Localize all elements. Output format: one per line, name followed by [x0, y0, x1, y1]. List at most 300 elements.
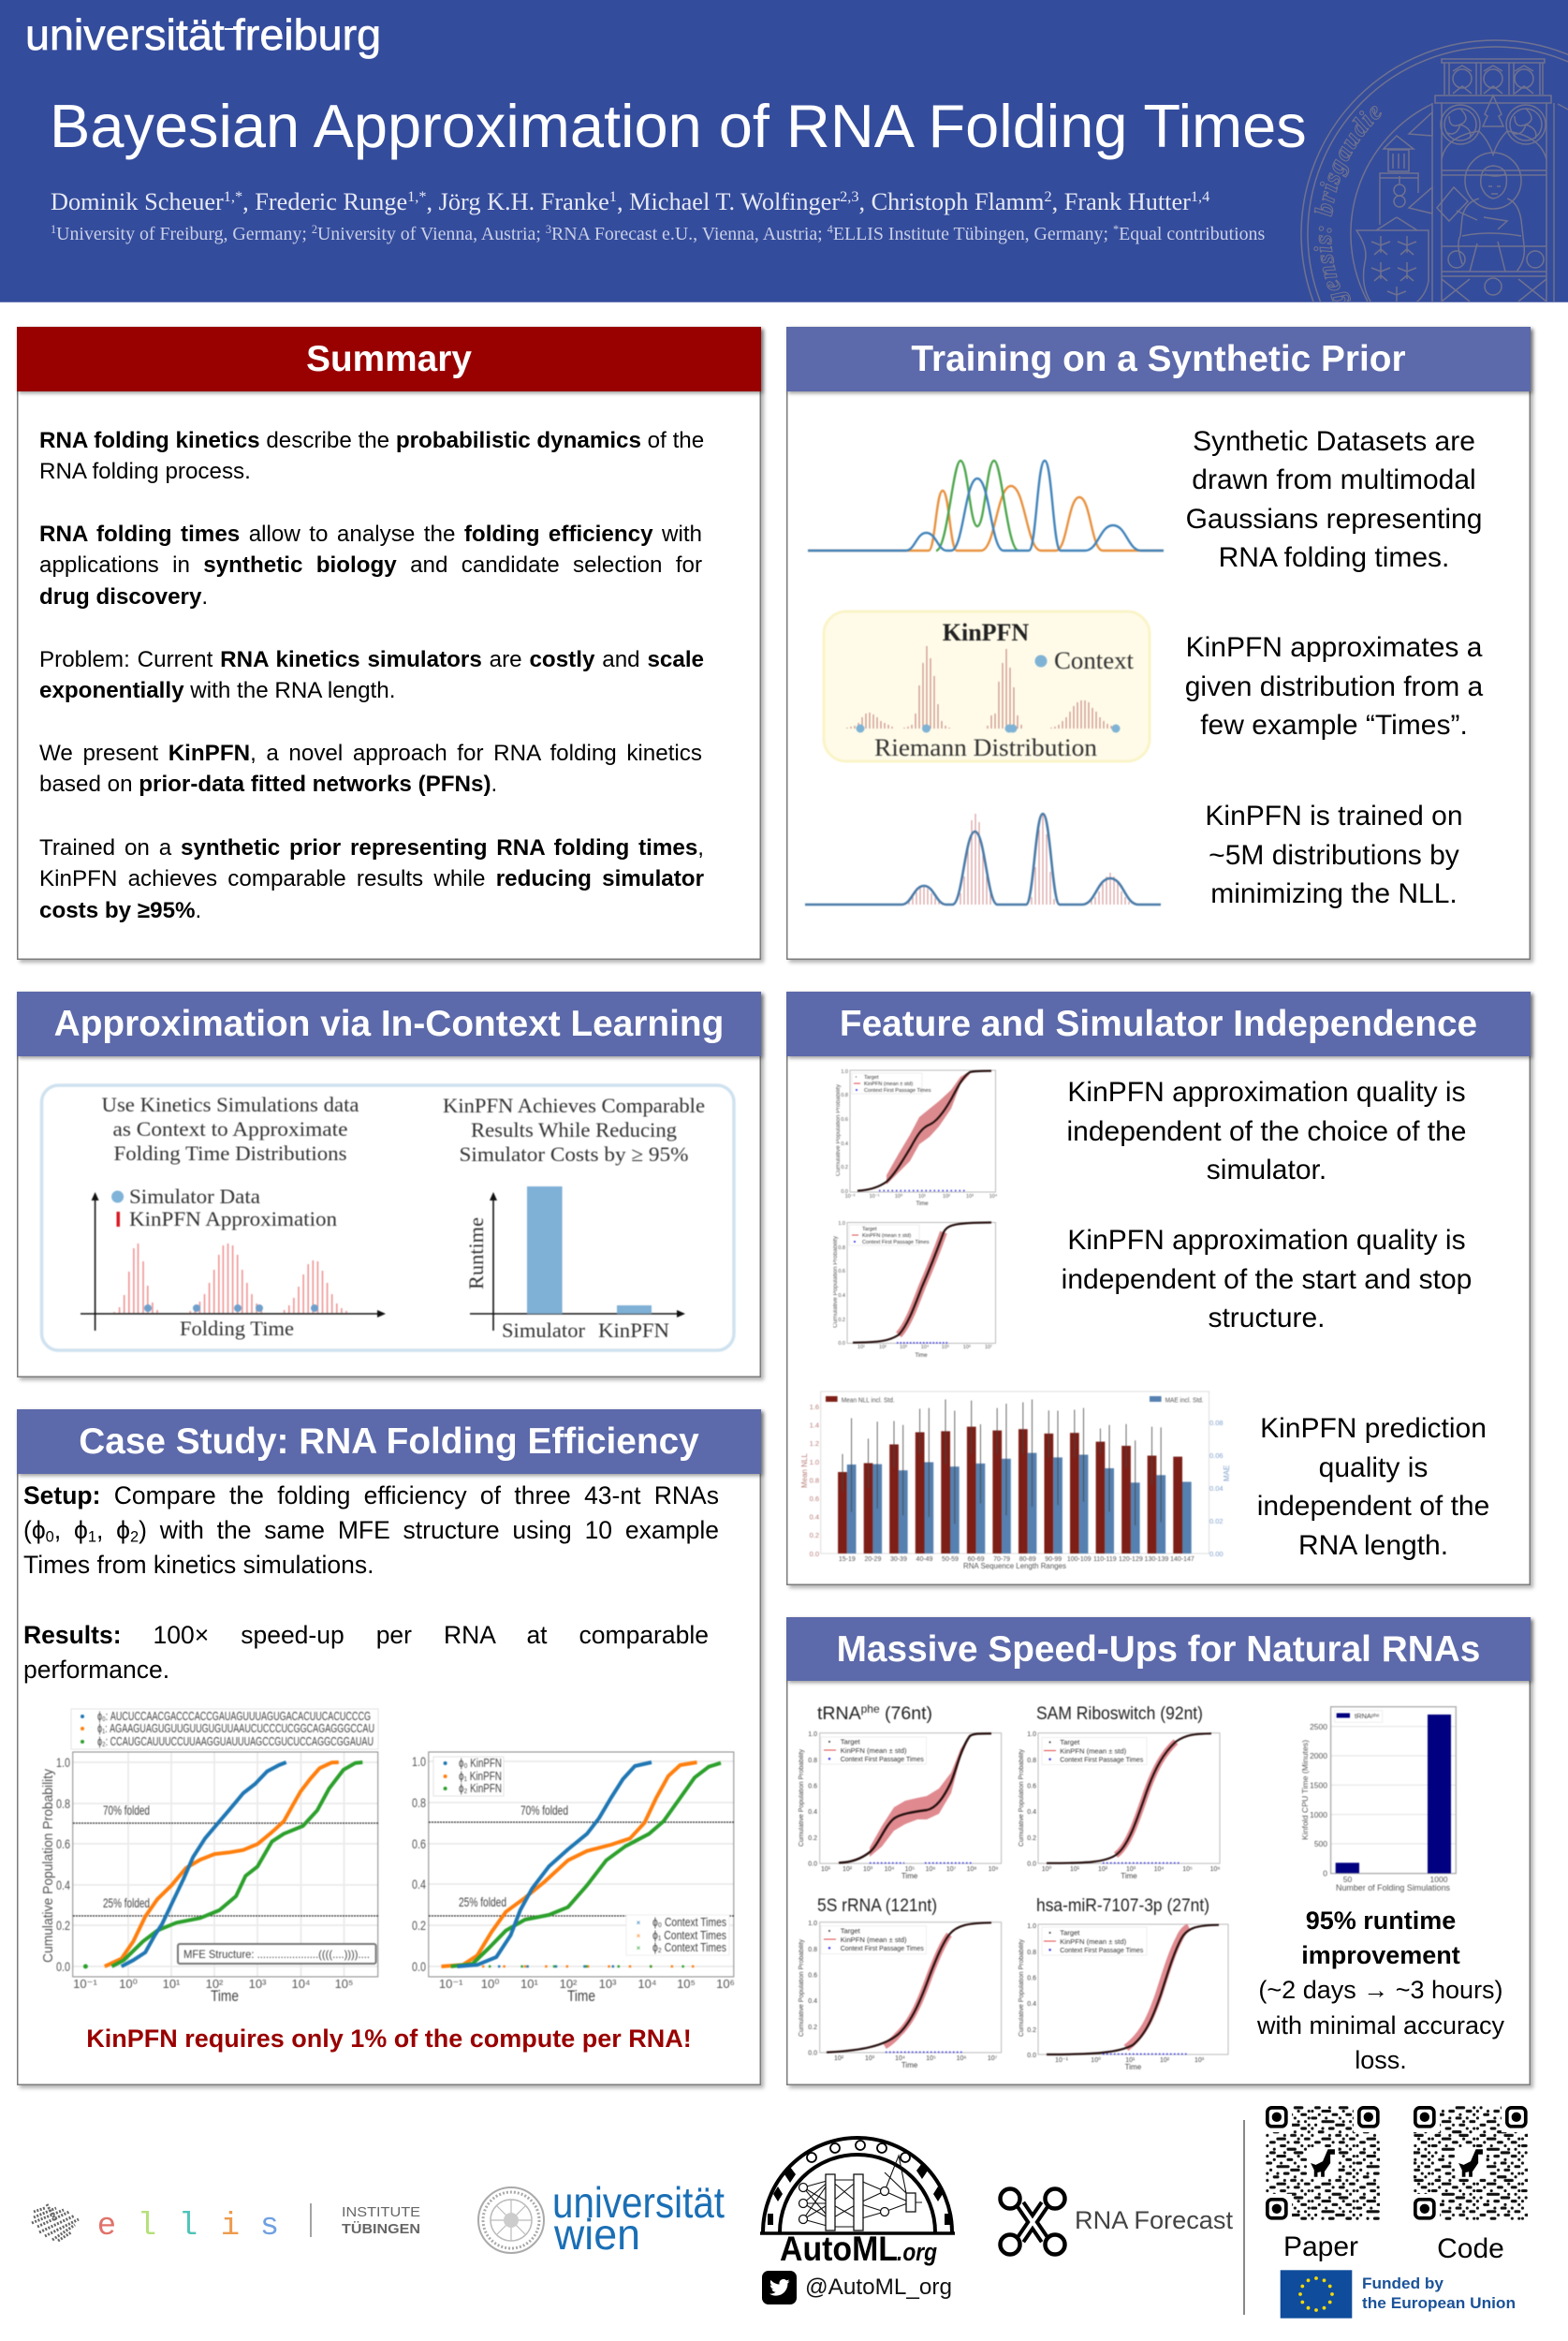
- chart: tRNA phe CDF: 10⁷: [946, 1866, 957, 1873]
- chart: KinPFN CDF curves: 70% folded: [520, 1804, 568, 1818]
- chart: simulator independence CDF: 10⁻¹: [870, 1194, 880, 1200]
- text: setup: Setup: Compare the folding efficiency of three 43-nt RNAs: [23, 1481, 719, 1509]
- text: runtime improvement: with minimal accuracy: [1257, 2011, 1504, 2039]
- chart: simulator independence CDF: 10⁴: [989, 1193, 998, 1200]
- logo: funded by the European Union: Funded by: [1362, 2275, 1444, 2292]
- chart: 5S rRNA CDF: 0.6: [808, 1972, 817, 1980]
- chart: SAM riboswitch CDF: 0.4: [1027, 1809, 1036, 1816]
- chart: tRNA phe CDF: 0.2: [808, 1835, 817, 1842]
- logo: ELLIS Institute Tübingen: i: [221, 2209, 240, 2245]
- text: simulator independence: [1066, 1077, 1466, 1185]
- chart: tRNA phe CDF: Context First Passage Times: [841, 1755, 924, 1763]
- text: RNA folding kinetics: RNA folding process.: [39, 459, 251, 484]
- chart: simulator CDF curves: 70% folded: [103, 1804, 150, 1818]
- diagram: in-context learning: Simulator Data: [129, 1185, 260, 1208]
- text: KinPFN introduction: We present KinPFN, a novel approach for RNA folding kinetics: [39, 740, 702, 766]
- chart: KinPFN CDF curves: 10⁴: [637, 1977, 656, 1991]
- chart: tRNA phe CDF: 10⁴: [885, 1866, 894, 1873]
- text: problem: exponentially with the RNA length.: [39, 678, 395, 703]
- chart: simulator independence CDF: Context First Passage Times: [864, 1088, 931, 1094]
- chart: simulator CDF curves: 0.8: [56, 1797, 70, 1811]
- chart: hsa-miR-7107-3p CDF: 1.0: [1027, 1923, 1036, 1930]
- chart: RNA length bar chart: MAE: [1223, 1465, 1231, 1481]
- chart: runtime bars: Number of Folding Simulations: [1336, 1883, 1450, 1892]
- chart: KinPFN CDF curves: ϕ₁ KinPFN: [459, 1770, 502, 1783]
- chart: simulator CDF curves: 0.4: [56, 1878, 70, 1892]
- chart: RNA length bar chart: 1.0: [810, 1458, 819, 1466]
- icon: paper QR code: [1266, 2106, 1380, 2220]
- text: KinPFN trained: ~5M distributions by: [1209, 839, 1459, 871]
- text: start and stop independence: independent of the start and stop: [1062, 1264, 1472, 1294]
- chart: runtime bars: 1000: [1310, 1810, 1327, 1819]
- chart: KinPFN CDF curves: 10³: [599, 1977, 617, 1991]
- chart: RNA length bar chart: Mean NLL: [800, 1453, 809, 1488]
- text: setup: Times from kinetics simulations.: [23, 1551, 374, 1579]
- chart: tRNA phe CDF: 10⁹: [989, 1866, 998, 1873]
- chart: RNA length bar chart: Mean NLL incl. Std.: [842, 1395, 895, 1405]
- chart: tRNA phe CDF: 10⁶: [926, 1866, 935, 1873]
- text: KinPFN approximates: [1185, 632, 1483, 741]
- chart: KinPFN CDF curves: 10⁵: [677, 1977, 696, 1991]
- text: KinPFN trained: [1205, 801, 1463, 909]
- text: KinPFN approximates: KinPFN approximates a: [1186, 632, 1482, 663]
- text: KinPFN approximates: given distribution from a: [1185, 670, 1483, 702]
- chart: start/stop independence CDF: 10³: [900, 1345, 907, 1350]
- logo: Universität Wien: wien: [553, 2210, 640, 2259]
- text: synthetic datasets: RNA folding times.: [1219, 542, 1449, 573]
- logo: AutoML.org: @AutoML_org: [805, 2275, 952, 2300]
- diagram: KinPFN Riemann distribution box: KinPFN: [943, 619, 1029, 646]
- chart: 5S rRNA CDF: Time: [901, 2061, 918, 2069]
- logo: universität freiburg: universitätfreiburg: [25, 10, 381, 59]
- chart: simulator CDF curves: 0.0: [56, 1960, 70, 1974]
- chart: KinPFN CDF curves: 0.6: [412, 1837, 426, 1851]
- chart: KinPFN CDF curves: [412, 1751, 735, 2005]
- logo: RNA Forecast: RNA Forecast: [1075, 2206, 1233, 2234]
- chart: tRNA phe CDF: tRNA: [817, 1703, 861, 1724]
- text: RNA length independence: [1257, 1413, 1489, 1560]
- chart: KinPFN CDF curves: ϕ₂ KinPFN: [459, 1782, 502, 1795]
- icon: university seal: [1300, 39, 1568, 302]
- chart: simulator CDF curves: Time: [211, 1987, 239, 2005]
- text: runtime improvement: [1257, 1907, 1504, 2074]
- chart: 5S rRNA CDF: 10⁷: [988, 2055, 998, 2062]
- chart: simulator independence CDF: 10⁻²: [845, 1194, 856, 1200]
- chart: RNA length bar chart: 0.8: [810, 1476, 819, 1484]
- chart: 5S rRNA CDF: 5S rRNA (121nt): [817, 1895, 937, 1916]
- heading: case study: Case Study: RNA Folding Efficiency: [79, 1421, 699, 1462]
- callout: compute requirement: KinPFN requires only 1% of the compute per RNA!: [86, 2024, 692, 2053]
- chart: RNA length bar chart: 100-109: [1067, 1556, 1092, 1563]
- chart: start/stop independence CDF: 10²: [879, 1345, 887, 1350]
- chart: SAM riboswitch CDF: Cumulative Population Probability: [1018, 1749, 1025, 1847]
- text: synthetic prior result: [39, 835, 704, 923]
- chart: simulator independence CDF: 10³: [966, 1194, 974, 1200]
- diagram: in-context learning: KinPFN Approximation: [129, 1207, 337, 1230]
- chart: start/stop independence CDF: 1.0: [838, 1221, 845, 1227]
- heading: training: Training on a Synthetic Prior: [911, 339, 1406, 379]
- chart: 5S rRNA CDF: [798, 1895, 1003, 2069]
- chart: RNA length bar chart: 110-119: [1093, 1556, 1117, 1563]
- chart: simulator CDF curves: 10⁻¹: [73, 1977, 97, 1991]
- chart: runtime bars: 50: [1343, 1875, 1352, 1884]
- diagram: in-context learning: Results While Reducing: [471, 1118, 677, 1141]
- chart: SAM riboswitch CDF: SAM Riboswitch (92nt): [1036, 1703, 1203, 1724]
- chart: 5S rRNA CDF: Cumulative Population Probability: [799, 1939, 805, 2037]
- logo: ELLIS Institute Tübingen: l: [179, 2209, 198, 2245]
- chart: KinPFN fit to distribution: [804, 812, 1162, 906]
- text: KinPFN introduction: based on prior-data fitted networks (PFNs).: [39, 772, 497, 797]
- chart: 5S rRNA CDF: 10⁵: [926, 2055, 936, 2062]
- chart: KinPFN CDF curves: 0.0: [412, 1960, 426, 1974]
- chart: SAM riboswitch CDF: 0.0: [1027, 1862, 1036, 1867]
- chart: tRNA phe CDF: 10²: [843, 1866, 853, 1873]
- panel: training on a synthetic prior: [786, 327, 1531, 960]
- chart: start/stop independence CDF: 10⁶: [963, 1344, 971, 1350]
- text: RNA folding kinetics: [39, 427, 704, 484]
- heading: training: [786, 327, 1531, 391]
- text: simulator independence: independent of the choice of the: [1066, 1116, 1466, 1146]
- chart: RNA length bar chart: 20-29: [864, 1556, 881, 1563]
- logo: funded by the European Union: the European Union: [1362, 2294, 1516, 2312]
- chart: tRNA phe CDF: 10¹: [821, 1866, 831, 1873]
- chart: simulator independence CDF: 0.0: [841, 1189, 848, 1195]
- chart: RNA length bar chart: 1.6: [810, 1403, 819, 1411]
- chart: start/stop independence CDF: 10⁴: [921, 1344, 930, 1350]
- chart: tRNA phe CDF: KinPFN (mean ± std): [841, 1746, 907, 1755]
- chart: KinPFN CDF curves: ×: [637, 1919, 641, 1927]
- panel: case study: [17, 1409, 761, 2085]
- logo: ELLIS Institute Tübingen: [32, 2203, 420, 2245]
- chart: KinPFN CDF curves: 25% folded: [459, 1895, 506, 1909]
- heading: speed-ups: [786, 1617, 1531, 1681]
- diagram: in-context learning: Simulator: [502, 1318, 586, 1342]
- logo: Universität Wien: [477, 2182, 725, 2259]
- chart: SAM riboswitch CDF: 0.2: [1027, 1835, 1036, 1842]
- chart: tRNA phe CDF: 0.8: [808, 1758, 817, 1764]
- chart: 5S rRNA CDF: Target: [841, 1927, 861, 1935]
- chart: hsa-miR-7107-3p CDF: 0.6: [1027, 1976, 1036, 1981]
- title: Bayesian Approximation of RNA Folding Times: [50, 92, 1307, 160]
- header banner: [0, 0, 1568, 302]
- chart: KinPFN CDF curves: ϕ₀ Context Times: [652, 1916, 726, 1929]
- chart: hsa-miR-7107-3p CDF: Cumulative Population Probability: [1018, 1939, 1025, 2037]
- chart: simulator CDF curves: 0.6: [56, 1837, 70, 1851]
- chart: hsa-miR-7107-3p CDF: 0.8: [1027, 1950, 1036, 1956]
- chart: multimodal gaussians: [807, 459, 1165, 552]
- chart: KinPFN CDF curves: 0.2: [412, 1919, 426, 1933]
- chart: 5S rRNA CDF: 1.0: [808, 1921, 817, 1927]
- chart: KinPFN CDF curves: ×: [637, 1932, 641, 1940]
- diagram: in-context learning: as Context to Approximate: [112, 1117, 348, 1141]
- chart: SAM riboswitch CDF: Time: [1121, 1872, 1137, 1880]
- chart: RNA length bar chart: 90-99: [1045, 1556, 1062, 1563]
- text: synthetic prior result: KinPFN achieves comparable results while reducing simulator: [39, 866, 704, 891]
- text: runtime improvement: 95% runtime: [1306, 1907, 1456, 1935]
- heading: summary: Summary: [306, 339, 472, 379]
- chart: RNA length bar chart: 15-19: [839, 1556, 856, 1563]
- chart: simulator independence CDF: 10¹: [918, 1194, 926, 1200]
- chart: 5S rRNA CDF: 0.8: [808, 1947, 817, 1953]
- panel: massive speed-ups: [786, 1617, 1531, 2085]
- chart: RNA length bar chart: 0.4: [810, 1513, 819, 1522]
- chart: KinPFN CDF curves: Time: [567, 1987, 595, 2005]
- chart: hsa-miR-7107-3p CDF: 0.2: [1027, 2027, 1036, 2034]
- chart: runtime bars: 0: [1323, 1869, 1327, 1878]
- chart: runtime bars: 1000: [1430, 1875, 1448, 1884]
- chart: 5S rRNA CDF: 10³: [865, 2055, 875, 2062]
- chart: tRNA phe CDF: Target: [841, 1738, 861, 1745]
- chart: hsa-miR-7107-3p CDF: Target: [1060, 1929, 1080, 1936]
- chart: KinPFN CDF curves: 1.0: [412, 1755, 426, 1769]
- divider line: footer: [1243, 2120, 1245, 2315]
- chart: hsa-miR-7107-3p CDF: 0.0: [1027, 2053, 1036, 2059]
- chart: start/stop independence CDF: 0.0: [838, 1341, 845, 1347]
- chart: 5S rRNA CDF: 0.4: [808, 1998, 817, 2005]
- text: KinPFN trained: KinPFN is trained on: [1205, 801, 1463, 832]
- text: RNA folding kinetics: RNA folding kinetics describe the probabilistic dynamics of the: [39, 427, 704, 453]
- chart: start/stop independence CDF: [833, 1220, 996, 1359]
- chart: start/stop independence CDF: 0.4: [838, 1293, 845, 1299]
- diagram: in-context learning: Simulator Costs by ≥ 95%: [459, 1142, 689, 1166]
- chart: hsa-miR-7107-3p CDF: 10⁻¹: [1055, 2057, 1069, 2064]
- chart: 5S rRNA CDF: 10⁶: [957, 2055, 966, 2062]
- chart: SAM riboswitch CDF: 10³: [1126, 1866, 1136, 1873]
- chart: tRNA phe CDF: phe: [861, 1702, 880, 1715]
- chart: tRNA phe CDF: 0.4: [808, 1809, 817, 1816]
- chart: tRNA phe CDF: 10⁵: [905, 1866, 915, 1873]
- text: synthetic prior result: Trained on a synthetic prior representing RNA folding times,: [39, 835, 704, 860]
- text: RNA length independence: RNA length.: [1298, 1530, 1448, 1560]
- chart: runtime bars: 500: [1314, 1839, 1327, 1848]
- chart: simulator CDF curves: 0.2: [56, 1919, 70, 1933]
- chart: KinPFN CDF curves: 10⁻¹: [439, 1977, 463, 1991]
- chart: start/stop independence CDF: 0.2: [838, 1318, 845, 1323]
- chart: RNA length bar chart: 50-59: [942, 1556, 959, 1563]
- chart: KinPFN CDF curves: 0.4: [412, 1877, 426, 1892]
- chart: tRNA phe CDF: 1.0: [808, 1731, 817, 1738]
- chart: SAM riboswitch CDF: 1.0: [1027, 1731, 1036, 1738]
- diagram: KinPFN Riemann distribution box: [822, 610, 1151, 763]
- logo: RNA Forecast: [998, 2186, 1233, 2257]
- chart: RNA length bar chart: 0.2: [810, 1531, 819, 1539]
- heading: case study: [17, 1409, 761, 1474]
- chart: RNA length bar chart: MAE incl. Std.: [1165, 1395, 1204, 1405]
- chart: SAM riboswitch CDF: Context First Passage Times: [1060, 1755, 1143, 1764]
- diagram: in-context learning: [39, 1082, 736, 1352]
- heading: feature independence: Feature and Simulator Independence: [840, 1004, 1477, 1044]
- chart: hsa-miR-7107-3p CDF: 10¹: [1125, 2057, 1136, 2064]
- chart: RNA length bar chart: 140-147: [1170, 1556, 1194, 1563]
- chart: start/stop independence CDF: KinPFN (mean ± std): [862, 1233, 911, 1239]
- text: KinPFN trained: minimizing the NLL.: [1210, 878, 1458, 909]
- text: synthetic datasets: [1186, 425, 1482, 573]
- chart: RNA length bar chart: RNA Sequence Length Ranges: [963, 1562, 1066, 1570]
- chart: KinPFN CDF curves: ×: [637, 1944, 641, 1952]
- heading: approximation: Approximation via In-Context Learning: [54, 1004, 724, 1044]
- chart: SAM riboswitch CDF: [1018, 1703, 1221, 1880]
- chart: 5S rRNA CDF: KinPFN (mean ± std): [841, 1936, 907, 1944]
- chart: SAM riboswitch CDF: 10¹: [1070, 1866, 1080, 1873]
- chart: hsa-miR-7107-3p CDF: 10²: [1160, 2057, 1170, 2064]
- chart: simulator independence CDF: 10⁰: [895, 1193, 903, 1200]
- chart: KinPFN CDF curves: 0.8: [412, 1796, 426, 1810]
- text: runtime improvement: (~2 days → ~3 hours): [1258, 1976, 1503, 2004]
- chart: hsa-miR-7107-3p CDF: 10⁰: [1091, 2056, 1101, 2064]
- chart: simulator CDF curves: [41, 1708, 379, 2005]
- chart: start/stop independence CDF: 0.8: [838, 1245, 845, 1251]
- chart: simulator CDF curves: 10⁰: [119, 1977, 138, 1991]
- text: setup: [23, 1481, 719, 1579]
- chart: hsa-miR-7107-3p CDF: hsa-miR-7107-3p (27nt): [1036, 1895, 1209, 1916]
- chart: RNA length bar chart: 60-69: [968, 1556, 985, 1563]
- chart: KinPFN CDF curves: ϕ₀ KinPFN: [459, 1757, 502, 1770]
- chart: tRNA phe CDF: Cumulative Population Probability: [799, 1749, 805, 1847]
- chart: SAM riboswitch CDF: 0.6: [1027, 1783, 1036, 1790]
- text: synthetic prior result: costs by ≥95%.: [39, 897, 201, 923]
- text: start and stop independence: [1062, 1225, 1472, 1333]
- text: runtime improvement: loss.: [1355, 2046, 1407, 2074]
- chart: simulator CDF curves: 10⁴: [291, 1977, 311, 1991]
- chart: 5S rRNA CDF: 0.0: [808, 2051, 817, 2056]
- chart: RNA length bar chart: [800, 1391, 1231, 1571]
- text: problem: [39, 646, 704, 703]
- chart: runtime bars: Kinfold CPU Time (Minutes): [1300, 1740, 1310, 1840]
- affiliations: 1University of Freiburg, Germany; 2University of Vienna, Austria; 3RNA Forecast e.U., Vienna, Austria; 4ELLIS Institute Tübingen, Germany; *Equal contributions: [51, 223, 1265, 244]
- chart: SAM riboswitch CDF: KinPFN (mean ± std): [1060, 1746, 1127, 1755]
- chart: simulator CDF curves: 1.0: [56, 1756, 70, 1770]
- heading: summary: [17, 327, 761, 391]
- chart: runtime bars: 2000: [1310, 1751, 1327, 1760]
- logo: ELLIS Institute Tübingen: TÜBINGEN: [342, 2221, 420, 2237]
- chart: tRNA phe CDF: [798, 1702, 1003, 1880]
- chart: SAM riboswitch CDF: Target: [1060, 1738, 1080, 1746]
- chart: simulator independence CDF: Cumulative Population Probability: [836, 1084, 842, 1176]
- logo: AutoML.org: .org: [897, 2238, 937, 2266]
- chart: simulator independence CDF: Time: [916, 1201, 929, 1207]
- chart: simulator independence CDF: 0.4: [841, 1141, 848, 1147]
- chart: KinPFN CDF curves: 10⁰: [481, 1977, 499, 1991]
- chart: RNA length bar chart: 0.06: [1209, 1451, 1224, 1460]
- chart: start/stop independence CDF: Time: [915, 1353, 928, 1359]
- chart: simulator independence CDF: 1.0: [841, 1069, 848, 1075]
- chart: hsa-miR-7107-3p CDF: Context First Passage Times: [1060, 1946, 1143, 1954]
- chart: runtime bars: [1300, 1706, 1457, 1893]
- text: problem: Problem: Current RNA kinetics simulators are costly and scale: [39, 646, 704, 672]
- chart: start/stop independence CDF: 10⁷: [985, 1344, 992, 1350]
- chart: simulator independence CDF: 10²: [943, 1194, 950, 1200]
- icon: code QR code: [1414, 2106, 1528, 2220]
- chart: SAM riboswitch CDF: 10⁵: [1182, 1866, 1193, 1873]
- text: synthetic datasets: Synthetic Datasets are: [1193, 425, 1475, 457]
- logo: funded by the European Union: [1281, 2270, 1516, 2319]
- logo: AutoML.org: [760, 2136, 955, 2304]
- logo: AutoML.org: AutoML: [780, 2230, 898, 2268]
- chart: RNA length bar chart: 0.02: [1209, 1517, 1224, 1525]
- text: results: performance.: [23, 1656, 169, 1684]
- chart: start/stop independence CDF: 10¹: [857, 1345, 865, 1350]
- chart: SAM riboswitch CDF: 0.8: [1027, 1758, 1036, 1764]
- chart: RNA length bar chart: 40-49: [916, 1556, 933, 1563]
- chart: RNA length bar chart: 120-129: [1119, 1556, 1143, 1563]
- diagram: in-context learning: Folding Time: [180, 1317, 294, 1340]
- diagram: KinPFN Riemann distribution box: Context: [1054, 647, 1135, 674]
- text: start and stop independence: KinPFN approximation quality is: [1067, 1225, 1466, 1256]
- chart: RNA length bar chart: 0.0: [810, 1550, 819, 1558]
- chart: start/stop independence CDF: 10⁵: [942, 1344, 949, 1350]
- chart: tRNA phe CDF: 10⁸: [967, 1866, 976, 1873]
- chart: start/stop independence CDF: Target: [862, 1227, 877, 1232]
- chart: hsa-miR-7107-3p CDF: KinPFN (mean ± std): [1060, 1937, 1127, 1946]
- chart: RNA length bar chart: 0.6: [810, 1494, 819, 1503]
- chart: 5S rRNA CDF: 10⁴: [895, 2055, 905, 2062]
- text: results: [23, 1620, 709, 1684]
- authors: Dominik Scheuer1,*, Frederic Runge1,*, Jörg K.H. Franke1, Michael T. Wolfinger2,3, Christoph Flamm2, Frank Hutter1,4: [51, 187, 1209, 215]
- label: code: Code: [1437, 2233, 1504, 2264]
- chart: SAM riboswitch CDF: 10²: [1098, 1866, 1108, 1873]
- chart: runtime bars: tRNAᵖʰᵉ: [1355, 1712, 1380, 1720]
- chart: hsa-miR-7107-3p CDF: 10³: [1194, 2057, 1205, 2064]
- text: synthetic datasets: Gaussians representing: [1186, 504, 1482, 534]
- chart: RNA length bar chart: 80-89: [1019, 1556, 1036, 1563]
- chart: simulator independence CDF: Target: [864, 1075, 879, 1081]
- diagram: in-context learning: Folding Time Distributions: [114, 1141, 346, 1165]
- logo: ELLIS Institute Tübingen: s: [260, 2209, 279, 2245]
- diagram: in-context learning: Runtime: [464, 1217, 488, 1289]
- chart: tRNA phe CDF: 0.6: [808, 1783, 817, 1790]
- chart: tRNA phe CDF: Time: [901, 1872, 918, 1880]
- chart: RNA length bar chart: 1.2: [810, 1439, 819, 1448]
- chart: tRNA phe CDF: (76nt): [880, 1703, 932, 1724]
- text: start and stop independence: structure.: [1208, 1303, 1326, 1333]
- chart: runtime bars: 2500: [1310, 1722, 1327, 1731]
- panel: summary: [17, 327, 761, 960]
- text: RNA folding times: [39, 521, 702, 609]
- chart: start/stop independence CDF: 0.6: [838, 1269, 845, 1274]
- label: paper: Paper: [1283, 2231, 1358, 2262]
- chart: tRNA phe CDF: 0.0: [808, 1862, 817, 1867]
- chart: RNA length bar chart: 0.04: [1209, 1484, 1224, 1493]
- panel: approximation via in-context learning: [17, 992, 761, 1377]
- logo: ELLIS Institute Tübingen: INSTITUTE: [342, 2204, 420, 2220]
- chart: KinPFN CDF curves: ϕ₂ Context Times: [652, 1941, 726, 1954]
- panel: feature and simulator independence: [786, 992, 1531, 1585]
- chart: simulator CDF curves: Cumulative Population Probability: [41, 1768, 56, 1963]
- chart: RNA length bar chart: 130-139: [1145, 1556, 1168, 1563]
- diagram: in-context learning: Use Kinetics Simulations data: [101, 1093, 359, 1116]
- chart: runtime bars: 1500: [1310, 1781, 1327, 1790]
- chart: simulator CDF curves: 25% folded: [103, 1896, 150, 1910]
- chart: simulator CDF curves: 10²: [206, 1977, 224, 1991]
- text: RNA folding times: drug discovery.: [39, 584, 208, 609]
- chart: start/stop independence CDF: Context First Passage Times: [862, 1240, 930, 1245]
- chart: simulator independence CDF: KinPFN (mean ± std): [864, 1082, 913, 1087]
- chart: RNA length bar chart: 1.4: [810, 1421, 819, 1430]
- chart: RNA length bar chart: 0.08: [1209, 1419, 1224, 1427]
- text: RNA length independence: KinPFN prediction: [1260, 1413, 1487, 1444]
- text: RNA folding times: applications in synthetic biology and candidate selection for: [39, 552, 702, 578]
- chart: KinPFN CDF curves: 10⁶: [716, 1977, 735, 1991]
- chart: hsa-miR-7107-3p CDF: 0.4: [1027, 2001, 1036, 2008]
- diagram: in-context learning: KinPFN Achieves Comparable: [443, 1094, 705, 1117]
- chart: simulator independence CDF: 0.6: [841, 1117, 848, 1123]
- chart: simulator CDF curves: 10³: [249, 1977, 267, 1991]
- text: RNA length independence: quality is: [1319, 1451, 1428, 1483]
- chart: simulator independence CDF: 0.8: [841, 1093, 848, 1098]
- chart: 5S rRNA CDF: 0.2: [808, 2024, 817, 2031]
- text: RNA length independence: independent of the: [1257, 1491, 1489, 1522]
- chart: hsa-miR-7107-3p CDF: [1018, 1895, 1229, 2070]
